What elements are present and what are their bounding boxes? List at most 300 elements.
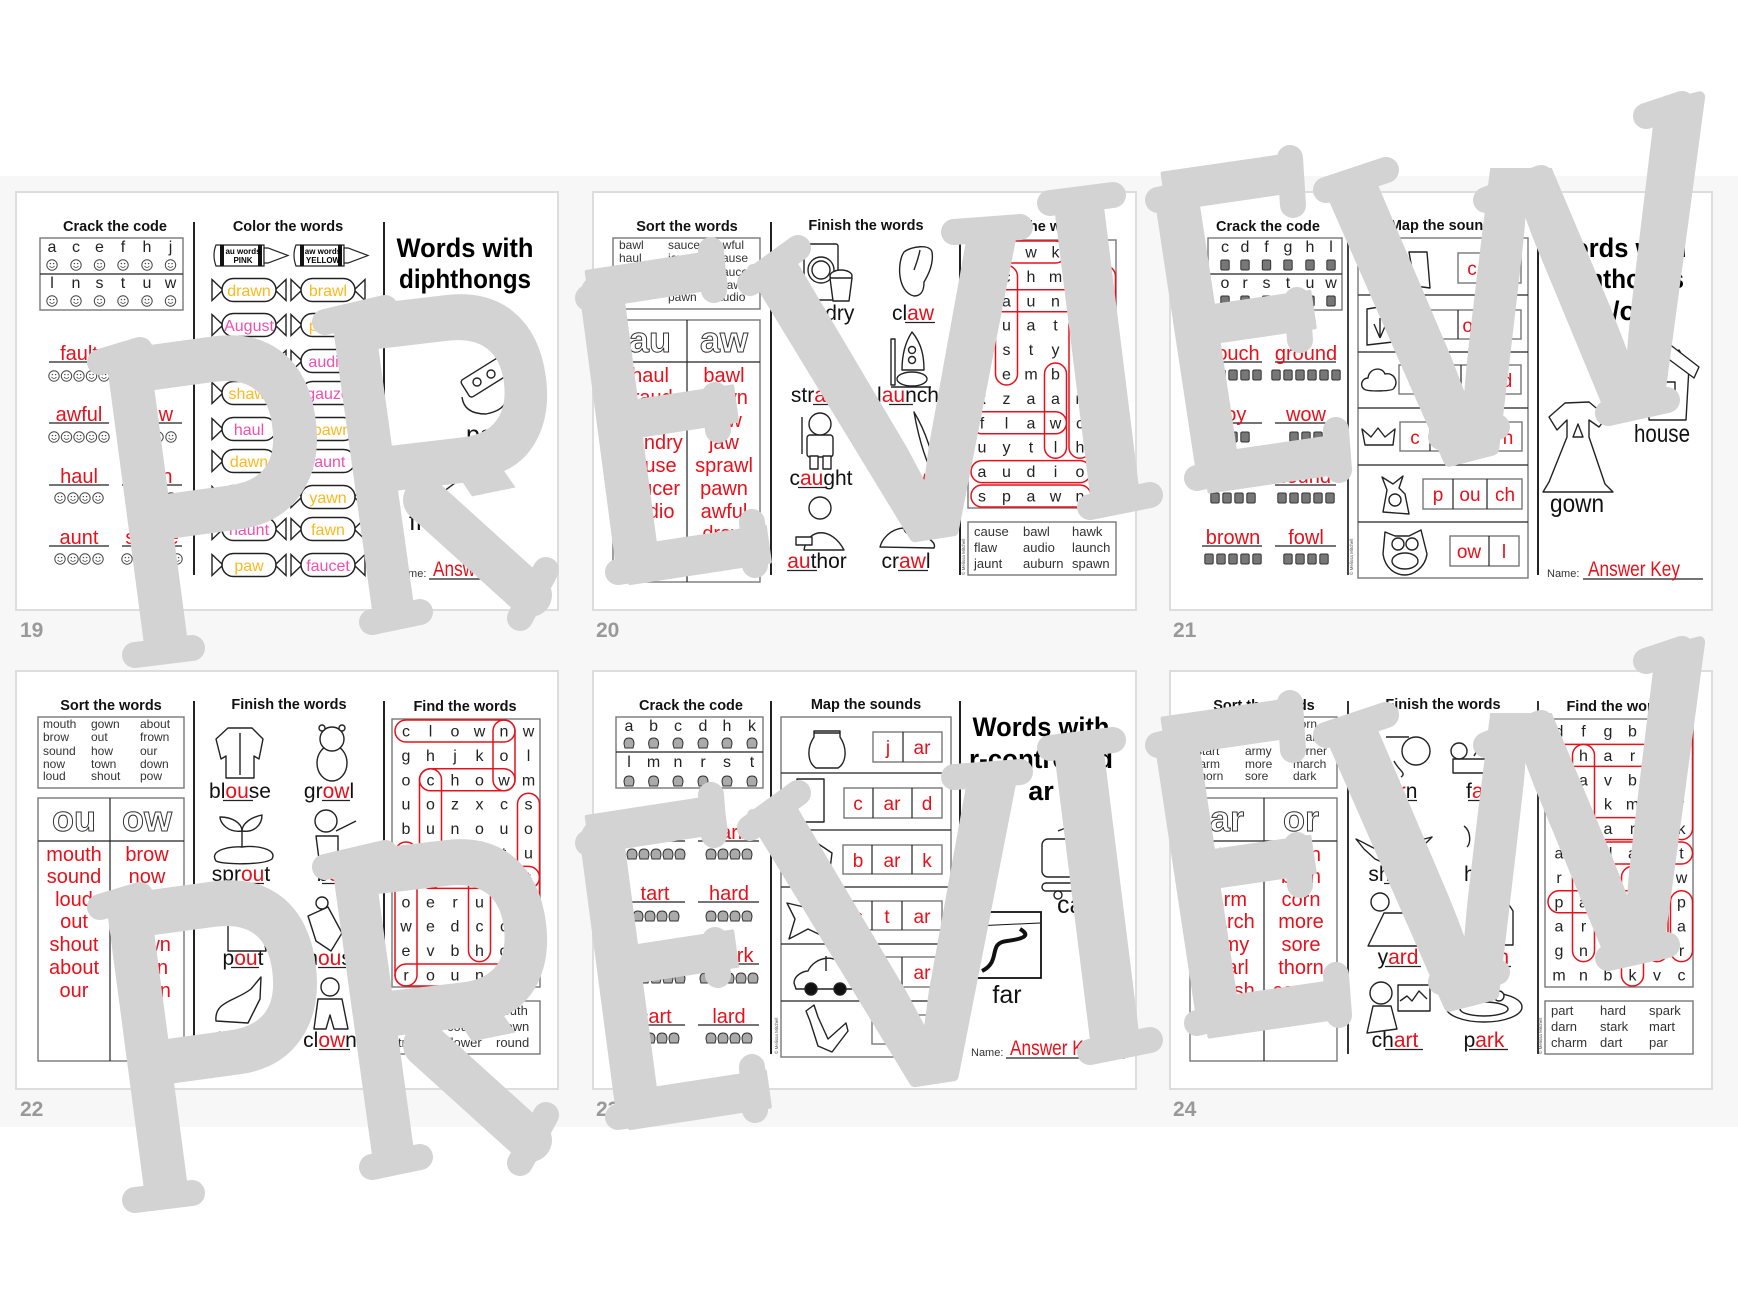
sorting table: ow bbox=[122, 798, 173, 839]
sorting table: marsh bbox=[1199, 980, 1255, 1002]
watermark: PREVIEW lower: W bbox=[1318, 550, 1738, 1115]
sound mapping table bbox=[1358, 238, 1528, 578]
word: caught: caught bbox=[789, 467, 853, 490]
sorting table: aw bbox=[700, 319, 749, 360]
coded words: ground bbox=[1275, 343, 1337, 365]
word bank: hard bbox=[1600, 1003, 1626, 1018]
icon: arm bbox=[806, 1005, 848, 1052]
heading: finish the words: Finish the words bbox=[1385, 697, 1501, 713]
word search grid: ochowm bbox=[402, 772, 535, 789]
word list: audio bbox=[716, 290, 746, 304]
code key table bbox=[40, 238, 183, 310]
sorting table: saw bbox=[706, 410, 742, 432]
word list bbox=[38, 717, 184, 788]
title: au/aw bbox=[427, 296, 504, 326]
word: launch: launch bbox=[877, 384, 939, 407]
sorting table: dawn bbox=[700, 387, 748, 409]
sorting table: farm bbox=[1207, 889, 1247, 911]
panel: worksheet 20 bbox=[593, 192, 1136, 642]
watermark: PREVIEW lower: R bbox=[296, 741, 608, 1253]
candy word grid: cause bbox=[228, 354, 270, 371]
copyright: © Melissa Mitchell bbox=[960, 539, 966, 575]
word search grid: fnaptu bbox=[404, 846, 533, 862]
word: chart: chart bbox=[1372, 1029, 1419, 1052]
word search grid: uytlhe bbox=[978, 440, 1109, 457]
code key table: orstuw bbox=[1221, 275, 1337, 292]
sound mapping table: l bbox=[1502, 542, 1506, 563]
word list: army bbox=[1245, 744, 1272, 758]
sorting table: sprawl bbox=[695, 455, 753, 477]
copyright: © Melissa Mitchell bbox=[773, 1018, 779, 1054]
coded words: hard bbox=[709, 883, 749, 905]
crayon legend bbox=[214, 245, 368, 266]
watermark: PREVIEW upper: I bbox=[1011, 104, 1183, 597]
icon: star bbox=[787, 895, 829, 939]
word list: corner bbox=[1293, 744, 1327, 758]
word: straw: straw bbox=[791, 384, 842, 407]
icon: crawl bbox=[880, 522, 935, 548]
word list: saucer bbox=[716, 265, 752, 279]
code key table: cdfghl bbox=[1221, 239, 1333, 256]
sound mapping table: m bbox=[918, 1021, 934, 1042]
word list: farm bbox=[1196, 757, 1220, 771]
heading: sort the words: Sort the words bbox=[60, 698, 162, 714]
watermark: PREVIEW lower: I bbox=[1011, 649, 1183, 1142]
word list: about bbox=[140, 717, 171, 731]
word list: yarn bbox=[1196, 717, 1219, 731]
sorting table: jaw bbox=[708, 432, 740, 454]
sorting table: yarn bbox=[1208, 866, 1246, 888]
sorting table: march bbox=[1199, 911, 1255, 933]
label: gown: gown bbox=[1550, 490, 1604, 518]
word bank: part bbox=[1551, 1003, 1574, 1018]
panel: worksheet 19 bbox=[16, 192, 558, 642]
word list: how bbox=[91, 744, 113, 758]
sound mapping table: ch bbox=[1495, 485, 1515, 506]
sound mapping table: d bbox=[922, 794, 932, 815]
coded words: cart bbox=[638, 1006, 672, 1028]
icon: far road bbox=[974, 912, 1041, 978]
sound mapping table: c bbox=[853, 794, 863, 815]
sorting table: awful bbox=[701, 501, 747, 523]
word: claw: claw bbox=[892, 302, 935, 325]
sound mapping table: c bbox=[1467, 259, 1477, 280]
coded words: thaw bbox=[131, 404, 174, 426]
word bank: cause bbox=[974, 524, 1009, 539]
word bank: hawk bbox=[1072, 524, 1103, 539]
icon: pout bbox=[228, 916, 266, 951]
word: yarn: yarn bbox=[1377, 780, 1417, 803]
panel: worksheet 23 bbox=[593, 671, 1136, 1121]
sound mapping table: ou bbox=[1462, 316, 1484, 337]
word list: loud bbox=[43, 769, 66, 783]
word search grid: rounds bbox=[403, 968, 532, 984]
icon: harp bbox=[1464, 816, 1491, 863]
heading: finish the words: Finish the words bbox=[231, 697, 347, 713]
sorting table: horn bbox=[1281, 844, 1321, 866]
word search grid: arcara bbox=[1555, 919, 1686, 936]
word search grid: wedcck bbox=[399, 919, 534, 936]
word list: dark bbox=[1293, 769, 1317, 783]
word search grid: omartk bbox=[1555, 821, 1686, 838]
word search grid: erkmsr bbox=[1555, 797, 1685, 814]
coded words: tart bbox=[641, 883, 670, 905]
icon: fraud bbox=[403, 454, 463, 497]
icon: shark bbox=[1356, 837, 1432, 863]
word list: more bbox=[1245, 757, 1273, 771]
word bank: round bbox=[496, 1035, 529, 1050]
word search grid: hawkeo bbox=[978, 244, 1109, 262]
word bank: bawl bbox=[1023, 524, 1050, 539]
word search grid: charmp bbox=[1555, 748, 1686, 765]
word search grid: rdoshw bbox=[1556, 870, 1688, 887]
sorting table: draw bbox=[702, 523, 746, 545]
title: diphthongs bbox=[1552, 264, 1684, 294]
word list: sauce bbox=[668, 238, 700, 252]
sorting table: pow bbox=[129, 911, 166, 933]
icon: howl bbox=[216, 977, 261, 1023]
word bank: stark bbox=[1600, 1019, 1629, 1034]
sorting table: corn bbox=[1282, 889, 1320, 911]
code key table bbox=[616, 717, 763, 788]
word search grid: flawcd bbox=[980, 415, 1109, 432]
word bank: spawn bbox=[1072, 556, 1110, 571]
copyright: © Melissa Mitchell bbox=[384, 1018, 390, 1054]
word list: town bbox=[91, 757, 116, 771]
sound mapping table: ow bbox=[1465, 428, 1489, 449]
sorting table: how bbox=[129, 889, 166, 911]
word search grid: ltrout bbox=[404, 870, 531, 887]
sorting table: mouth bbox=[46, 844, 102, 866]
sound mapping table: s bbox=[853, 907, 863, 928]
word bank: now bbox=[398, 1003, 422, 1018]
panel: worksheet 21 bbox=[1170, 192, 1712, 642]
coded words: couch bbox=[1206, 343, 1260, 365]
word list: bawl bbox=[619, 238, 644, 252]
word bank: mart bbox=[1649, 1019, 1675, 1034]
sound mapping table: c bbox=[1410, 428, 1420, 449]
word list: our bbox=[140, 744, 157, 758]
label: house: house bbox=[1634, 420, 1690, 448]
label: far: far bbox=[992, 981, 1022, 1009]
word: bow: bow bbox=[317, 863, 356, 886]
word bank bbox=[392, 1001, 540, 1054]
sound mapping table: c bbox=[882, 963, 892, 984]
code key table: lnstuw bbox=[50, 275, 177, 292]
sound mapping table: d bbox=[1502, 371, 1512, 392]
heading: find the words: Find the words bbox=[989, 219, 1093, 235]
word list: born bbox=[1196, 730, 1220, 744]
sorting table: loud bbox=[55, 889, 93, 911]
sound mapping table: c bbox=[1408, 371, 1418, 392]
title: ar bbox=[1028, 776, 1054, 806]
candy word grid: gauze bbox=[306, 386, 350, 403]
sound mapping table: ar bbox=[884, 851, 901, 872]
word list: brow bbox=[43, 730, 69, 744]
coded words: fault bbox=[60, 343, 98, 365]
icon: gown bbox=[1543, 402, 1613, 492]
sound mapping table: ou bbox=[1466, 371, 1488, 392]
word search grid: evbhop bbox=[402, 943, 533, 960]
word search grid: audiom bbox=[978, 464, 1111, 481]
icon: owl bbox=[1383, 530, 1427, 575]
word list: haul bbox=[619, 251, 642, 265]
sorting table: ou bbox=[52, 798, 96, 839]
heading: sort the words: Sort the words bbox=[1213, 698, 1315, 714]
word list: now bbox=[43, 757, 65, 771]
page number: 19 bbox=[20, 619, 43, 642]
word list: sprawl bbox=[668, 265, 703, 279]
word list: marsh bbox=[1245, 717, 1278, 731]
word search grid: dfgbvs bbox=[1555, 724, 1686, 740]
word search grid: aedart bbox=[1555, 846, 1684, 862]
candy word grid: brawl bbox=[309, 283, 347, 300]
icon: straw bbox=[804, 328, 832, 382]
title: Words with bbox=[972, 712, 1110, 742]
coded words: shark bbox=[705, 945, 754, 967]
sorting table: audio bbox=[626, 501, 674, 523]
candy word grid: yawn bbox=[309, 490, 347, 507]
word bank: trout bbox=[398, 1035, 424, 1050]
word search grid: clownw bbox=[402, 724, 535, 740]
candy word grid: paw bbox=[234, 558, 264, 575]
heading: crack the code: Crack the code bbox=[639, 698, 743, 714]
watermark: PREVIEW upper: E bbox=[1126, 52, 1375, 593]
sound mapping table: ar bbox=[884, 794, 901, 815]
word: harp: harp bbox=[1464, 863, 1506, 886]
word list: sore bbox=[1245, 769, 1269, 783]
candy word grid: August bbox=[224, 318, 274, 335]
sorting table: gown bbox=[123, 934, 171, 956]
icon: chart bbox=[1367, 982, 1430, 1033]
icon: mouse bbox=[308, 897, 342, 951]
word bank: south bbox=[496, 1003, 528, 1018]
sound mapping table: j bbox=[885, 738, 890, 759]
word list: snarl bbox=[1293, 730, 1319, 744]
word bank: launch bbox=[1072, 540, 1110, 555]
icon: caught bbox=[802, 413, 833, 469]
word: author: author bbox=[787, 550, 847, 573]
watermark: PREVIEW upper bbox=[87, 91, 1705, 668]
name line: Answer Key bbox=[1010, 1037, 1102, 1060]
word list: march bbox=[1293, 757, 1326, 771]
sound mapping table: fl bbox=[1424, 316, 1434, 337]
sound mapping table: r bbox=[1442, 428, 1449, 449]
word bank bbox=[1545, 1001, 1693, 1054]
page number: 20 bbox=[596, 619, 619, 642]
word list: thorn bbox=[1196, 769, 1223, 783]
word search grid: gnurdr bbox=[1555, 943, 1685, 960]
heading: map the sounds: Map the sounds bbox=[811, 697, 921, 713]
candy word grid: fawn bbox=[311, 522, 345, 539]
word search grid: ghjkol bbox=[402, 748, 530, 765]
watermark: PREVIEW lower: E bbox=[1126, 597, 1375, 1138]
sorting table: pawn bbox=[700, 478, 748, 500]
word bank: flower bbox=[447, 1035, 482, 1050]
word search grid: uozxcs bbox=[402, 797, 532, 814]
word bank: audio bbox=[1023, 540, 1055, 555]
word bank: dart bbox=[1600, 1035, 1623, 1050]
sound mapping table: ou bbox=[1459, 485, 1481, 506]
sound mapping table: l bbox=[1442, 371, 1446, 392]
word: crawl: crawl bbox=[881, 550, 931, 573]
word search grid: bunouo bbox=[402, 821, 533, 838]
icon: farm bbox=[1451, 731, 1504, 773]
word list bbox=[613, 238, 760, 309]
sorting table: brow bbox=[125, 844, 169, 866]
panel: worksheet 22 bbox=[16, 671, 558, 1121]
sound mapping table: p bbox=[1433, 485, 1443, 506]
icon: pause button bbox=[460, 357, 509, 414]
icon: car bbox=[794, 956, 857, 995]
heading: color the words: Color the words bbox=[233, 219, 343, 235]
word: shark: shark bbox=[1368, 863, 1420, 886]
word bank: par bbox=[1649, 1035, 1668, 1050]
word: farm: farm bbox=[1466, 780, 1508, 803]
word list: mouth bbox=[43, 717, 76, 731]
page background band bbox=[0, 176, 1738, 1127]
word list: corn bbox=[1245, 730, 1268, 744]
word search grid bbox=[968, 240, 1116, 508]
word: park: park bbox=[1464, 1029, 1505, 1052]
word list: draw bbox=[716, 278, 742, 292]
watermark: PREVIEW upper: V bbox=[735, 142, 1083, 641]
coded words: toy bbox=[1220, 404, 1246, 426]
word bank: pouch bbox=[447, 1003, 482, 1018]
heading: map the sounds: Map the sounds bbox=[1390, 218, 1500, 234]
copyright: © Melissa Mitchell bbox=[1537, 1018, 1543, 1054]
icon: cart bbox=[1042, 827, 1102, 899]
icon: rocket launch bbox=[891, 332, 931, 387]
watermark: PREVIEW upper: E bbox=[551, 151, 795, 682]
word list: jaw bbox=[667, 251, 686, 265]
word list bbox=[1190, 717, 1337, 788]
word: mouse: mouse bbox=[300, 947, 364, 970]
coded words bbox=[1202, 343, 1340, 564]
word bank: darn bbox=[1551, 1019, 1577, 1034]
copyright: © Melissa Mitchell bbox=[1348, 539, 1354, 575]
sorting table bbox=[38, 798, 184, 1061]
sorting table: sound bbox=[47, 866, 101, 888]
sorting table: now bbox=[129, 866, 166, 888]
word bank bbox=[968, 522, 1116, 575]
icon: card bbox=[797, 779, 824, 822]
coded words: haul bbox=[60, 466, 98, 488]
heading: finish the words: Finish the words bbox=[808, 218, 924, 234]
word search grid: oeruah bbox=[402, 894, 533, 911]
label: fraud: fraud bbox=[409, 508, 466, 536]
code key table: abcdhk bbox=[625, 718, 757, 735]
icon: dog barking bbox=[797, 843, 832, 869]
heading: find the words: Find the words bbox=[1566, 699, 1670, 715]
heading: sort the words: Sort the words bbox=[636, 219, 738, 235]
sorting table bbox=[613, 319, 760, 582]
sound mapping table: k bbox=[922, 851, 932, 872]
sorting table: snarl bbox=[1205, 957, 1249, 979]
candy word grid: drawn bbox=[227, 283, 271, 300]
word: growl: growl bbox=[304, 780, 354, 803]
word list: sound bbox=[43, 744, 76, 758]
candy word grid: jaunt bbox=[310, 454, 346, 471]
sorting table: about bbox=[49, 957, 99, 979]
word list: out bbox=[91, 730, 108, 744]
word search grid: astyau bbox=[978, 342, 1109, 359]
sorting table: out bbox=[60, 911, 88, 933]
icon: bow bbox=[315, 810, 356, 867]
coded words bbox=[625, 822, 759, 1043]
word list: awful bbox=[716, 238, 744, 252]
word bank: clown bbox=[496, 1019, 529, 1034]
code key table: acefhj bbox=[48, 239, 172, 256]
name line: Name: bbox=[394, 568, 426, 580]
word search grid bbox=[392, 719, 540, 987]
word: blouse: blouse bbox=[209, 780, 271, 803]
watermark: PREVIEW lower: V bbox=[735, 687, 1083, 1186]
sorting table: haul bbox=[631, 365, 669, 387]
word list: shout bbox=[91, 769, 121, 783]
sorting table: born bbox=[1281, 866, 1321, 888]
sound mapping table: ow bbox=[1457, 542, 1481, 563]
candy word grid: spawn bbox=[305, 422, 351, 439]
word: pout: pout bbox=[223, 947, 264, 970]
icon: author bbox=[796, 497, 844, 550]
sorting table: down bbox=[123, 980, 171, 1002]
sound mapping table: ar bbox=[914, 738, 931, 759]
sorting table: start bbox=[1208, 844, 1247, 866]
word bank: charm bbox=[1551, 1035, 1587, 1050]
name line: Name: bbox=[1547, 568, 1579, 580]
watermark: PREVIEW lower: P bbox=[70, 781, 368, 1292]
word list: saw bbox=[619, 290, 641, 304]
sorting table: shout bbox=[50, 934, 99, 956]
word: hawk: hawk bbox=[887, 467, 937, 490]
sound mapping table: ar bbox=[914, 963, 931, 984]
candy word grid bbox=[212, 278, 365, 576]
candy word grid: fauna bbox=[229, 490, 269, 507]
sorting table: or bbox=[1283, 798, 1319, 839]
candy word grid: haul bbox=[234, 422, 264, 439]
coded words: brown bbox=[1206, 527, 1260, 549]
page number: 22 bbox=[20, 1098, 43, 1121]
title: Words with bbox=[1550, 233, 1686, 263]
icon: cloud bbox=[1362, 369, 1396, 391]
icon: hawk bbox=[914, 412, 937, 482]
word: yard: yard bbox=[1378, 946, 1418, 969]
crayon legend: au words bbox=[225, 247, 261, 256]
name line: Answer Key bbox=[433, 558, 525, 581]
word: howl: howl bbox=[217, 1029, 261, 1052]
word bank: chow bbox=[398, 1019, 429, 1034]
word: barn: barn bbox=[1467, 946, 1509, 969]
word bank: flaw bbox=[974, 540, 998, 555]
icon: jar bbox=[809, 731, 845, 768]
watermark: PREVIEW upper: W bbox=[1318, 5, 1738, 570]
word list: gown bbox=[91, 717, 120, 731]
page number: 24 bbox=[1173, 1098, 1197, 1121]
icon: claw bbox=[900, 247, 932, 296]
word list: horn bbox=[1293, 717, 1317, 731]
sound mapping table: b bbox=[853, 851, 863, 872]
title: ou/ow bbox=[1579, 296, 1658, 326]
word list: start bbox=[1196, 744, 1220, 758]
crayon legend: aw words bbox=[305, 247, 342, 256]
title: Words with bbox=[396, 233, 534, 263]
coded words: wow bbox=[1285, 404, 1327, 426]
crayon legend: YELLOW bbox=[306, 256, 341, 265]
icon: growl bbox=[317, 725, 347, 781]
code key table bbox=[1208, 238, 1342, 310]
coded words: aunt bbox=[60, 527, 99, 549]
